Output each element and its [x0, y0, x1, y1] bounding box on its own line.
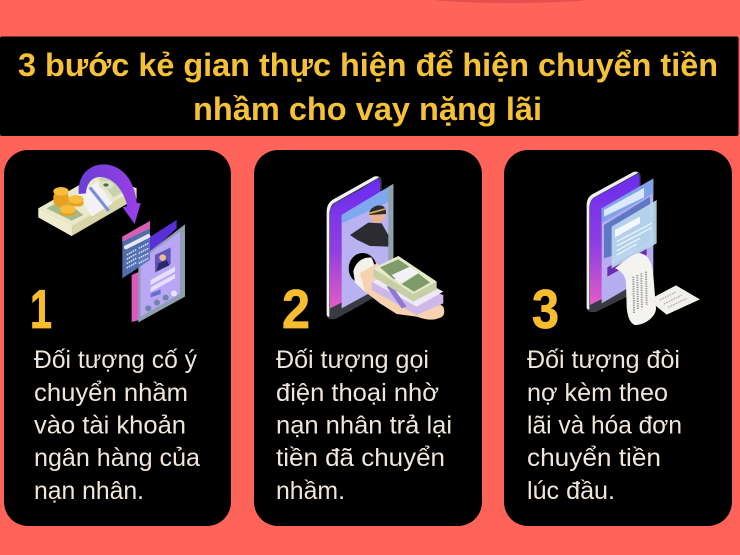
- step 1 text: ngân hàng của: [34, 444, 200, 472]
- step 3 text: [527, 346, 682, 505]
- title banner: [0, 36, 738, 136]
- step 2 text: điện thoại nhờ: [276, 379, 439, 407]
- step 2 text: nạn nhân trả lại: [276, 412, 452, 440]
- step 3 text: lãi và hóa đơn: [527, 412, 682, 440]
- step 2 text: tiền đã chuyển: [276, 444, 445, 472]
- step 1 text: [34, 346, 200, 505]
- panel: step 1: [4, 150, 231, 526]
- step 2 text: Đối tượng gọi: [276, 346, 429, 374]
- title text: nhầm cho vay nặng lãi: [193, 91, 542, 127]
- icon: money transferred to phone: [38, 164, 185, 322]
- title text: [18, 47, 718, 127]
- scammer: [350, 205, 388, 247]
- panel: step 3: [504, 150, 732, 526]
- step 1 text: Đối tượng cố ý: [34, 346, 197, 374]
- step 3 text: lúc đầu.: [527, 477, 615, 505]
- panel: step 2: [254, 150, 482, 526]
- step 3 text: Đối tượng đòi: [527, 346, 680, 374]
- number 3: 3: [532, 278, 559, 340]
- arrow: [79, 164, 141, 224]
- number 1: 1: [30, 278, 52, 340]
- step 1 text: vào tài khoản: [34, 412, 186, 440]
- receipt: [615, 253, 700, 325]
- step 3 text: chuyển tiền: [527, 444, 661, 472]
- title text: 3 bước kẻ gian thực hiện để hiện chuyển tiền: [18, 47, 718, 83]
- step 2 text: [276, 346, 452, 505]
- step 3 text: nợ kèm theo: [527, 379, 668, 407]
- decorative top ellipse: [422, 0, 598, 3]
- number 2: 2: [282, 278, 310, 340]
- step 1 text: chuyển nhầm: [34, 379, 188, 407]
- step 1 text: nạn nhân.: [34, 477, 144, 505]
- icon: scammer on phone with money in hand: [327, 176, 444, 320]
- icon: phone with bill receipt: [587, 172, 700, 325]
- step 2 text: nhầm.: [276, 477, 345, 505]
